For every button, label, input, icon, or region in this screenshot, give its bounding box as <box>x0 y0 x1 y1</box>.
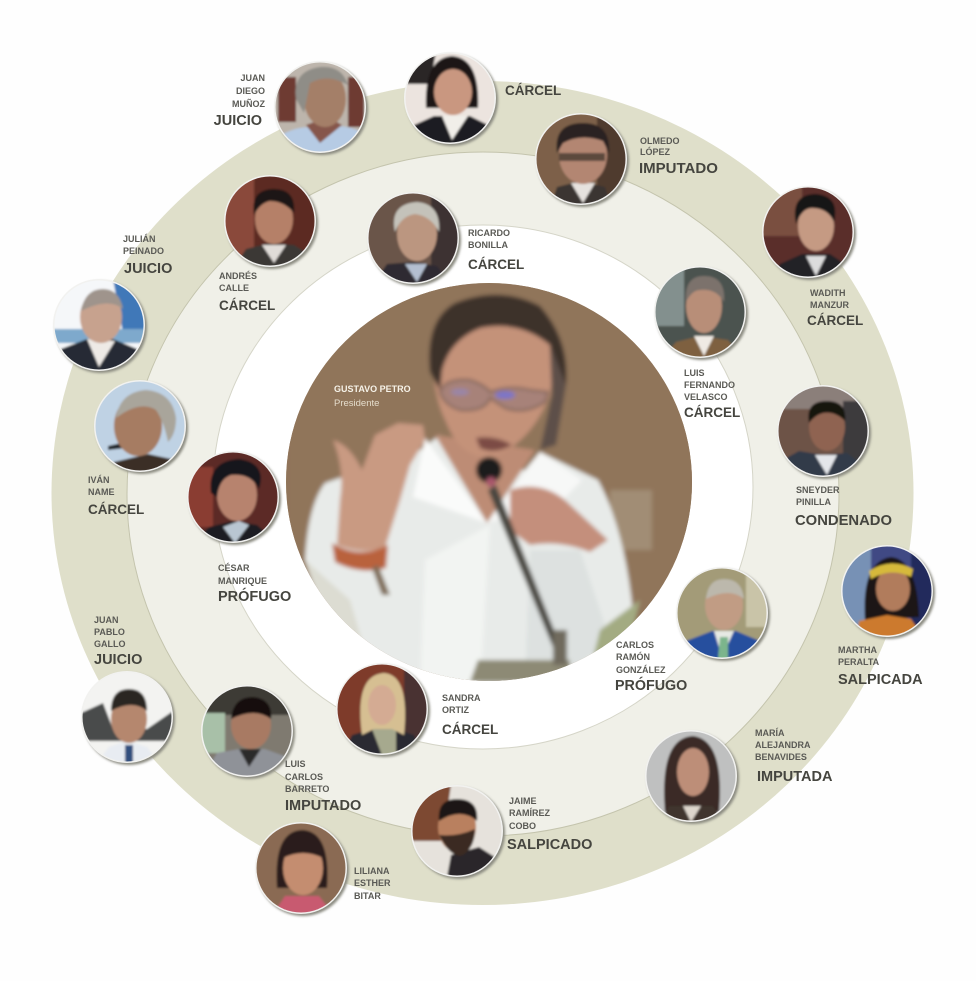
person: Iván Name <box>88 380 188 517</box>
label: Jaime Ramírez Cobo: RAMÍREZ <box>509 808 550 818</box>
person: Luis Carlos Barreto <box>201 685 361 814</box>
label: Sneyder Pinilla: CONDENADO <box>795 513 892 529</box>
label: Liliana Esther Bitar: ESTHER <box>354 878 391 888</box>
label: Juan Pablo Gallo: JUAN <box>94 615 119 625</box>
person: María Alejandra Benavides <box>645 728 833 824</box>
label: María Alejandra Benavides: MARÍA <box>755 728 785 738</box>
label: Liliana Esther Bitar: LILIANA <box>354 866 390 876</box>
person: Liliana Esther Bitar <box>255 822 391 916</box>
label: Julián Peinado: JUICIO <box>124 261 172 277</box>
inner ring <box>213 225 753 749</box>
person: Martha Peralta <box>838 545 935 688</box>
label: César Manrique: CÉSAR <box>218 563 250 573</box>
person: Ricardo Bonilla <box>367 192 524 286</box>
person: woman top <box>404 52 561 146</box>
label: Sandra Ortiz: SANDRA <box>442 693 481 703</box>
person: Olmedo López <box>535 113 718 207</box>
label: Ricardo Bonilla: CÁRCEL <box>468 257 524 272</box>
label: Iván Name: NAME <box>88 487 114 497</box>
label: Wadith Manzur <box>807 288 863 328</box>
label: Olmedo López: OLMEDO <box>640 136 680 146</box>
label: Juan Diego Muñoz: JUAN <box>240 73 265 83</box>
label: Andrés Calle: ANDRÉS <box>219 271 257 281</box>
person: Julián Peinado <box>53 234 172 373</box>
label: Luis Fernando Velasco: VELASCO <box>684 392 728 402</box>
person: César Manrique <box>187 451 291 605</box>
label: Wadith Manzur: WADITH <box>810 288 846 298</box>
label: Martha Peralta: PERALTA <box>838 657 880 667</box>
label: Ricardo Bonilla <box>468 228 524 272</box>
label: Martha Peralta <box>838 645 923 688</box>
name: Gustavo Petro: Presidente <box>334 398 379 409</box>
label: Julián Peinado: JULIÁN <box>123 234 156 244</box>
label: Liliana Esther Bitar <box>354 866 391 901</box>
label: Carlos Ramón González: GONZÁLEZ <box>616 665 666 675</box>
label: Olmedo López: IMPUTADO <box>639 160 718 177</box>
label: Iván Name: CÁRCEL <box>88 502 144 517</box>
label: Martha Peralta: SALPICADA <box>838 672 923 688</box>
label: María Alejandra Benavides: IMPUTADA <box>757 769 833 785</box>
label: Carlos Ramón González: RAMÓN <box>616 651 650 662</box>
person: Juan Pablo Gallo <box>81 615 175 765</box>
label: Martha Peralta: MARTHA <box>838 645 877 655</box>
label: César Manrique: MANRIQUE <box>218 576 267 586</box>
name: Gustavo Petro <box>334 384 411 409</box>
label: César Manrique <box>218 563 291 605</box>
label: Luis Carlos Barreto <box>285 759 361 814</box>
label: Carlos Ramón González: PRÓFUGO <box>615 676 687 694</box>
label: Wadith Manzur: MANZUR <box>810 300 849 310</box>
person: Luis Fernando Velasco <box>654 266 748 420</box>
person: Carlos Ramón González <box>615 567 770 694</box>
label: Olmedo López: LÓPEZ <box>640 146 671 157</box>
label: Andrés Calle: CALLE <box>219 283 249 293</box>
person: Jaime Ramírez Cobo <box>411 785 592 879</box>
label: María Alejandra Benavides <box>755 728 833 785</box>
label: César Manrique: PRÓFUGO <box>218 587 291 605</box>
label: Cárcel: CÁRCEL <box>505 83 561 98</box>
person: Andrés Calle <box>219 175 318 313</box>
central photo: Gustavo Petro <box>286 283 696 690</box>
outer ring <box>52 81 914 905</box>
label: Luis Fernando Velasco: CÁRCEL <box>684 405 740 420</box>
label: Sneyder Pinilla <box>795 485 892 529</box>
label: Andrés Calle: CÁRCEL <box>219 298 275 313</box>
label: Luis Fernando Velasco: FERNANDO <box>684 380 735 390</box>
middle ring <box>127 152 839 836</box>
label: Julián Peinado <box>123 234 172 277</box>
label: Carlos Ramón González <box>615 640 687 694</box>
person: Sneyder Pinilla <box>777 385 892 529</box>
label: María Alejandra Benavides: BENAVIDES <box>755 752 807 762</box>
label: Iván Name <box>88 475 144 517</box>
label: Luis Carlos Barreto: CARLOS <box>285 772 323 782</box>
label: Carlos Ramón González: CARLOS <box>616 640 654 650</box>
label: Sandra Ortiz: ORTIZ <box>442 705 469 715</box>
person: Sandra Ortiz <box>336 663 498 757</box>
label: María Alejandra Benavides: ALEJANDRA <box>755 740 811 750</box>
label: Juan Diego Muñoz: DIEGO <box>236 86 265 96</box>
label: Sandra Ortiz: CÁRCEL <box>442 722 498 737</box>
label: Juan Pablo Gallo: PABLO <box>94 627 125 637</box>
label: Ricardo Bonilla: RICARDO <box>468 228 510 238</box>
label: Luis Carlos Barreto: LUIS <box>285 759 306 769</box>
label: Luis Fernando Velasco <box>684 368 740 420</box>
label: Olmedo López <box>639 136 718 177</box>
label: Sandra Ortiz <box>442 693 498 737</box>
label: Sneyder Pinilla: SNEYDER <box>796 485 840 495</box>
label: Jaime Ramírez Cobo: SALPICADO <box>507 837 592 853</box>
person: Wadith Manzur <box>762 186 863 328</box>
label: Liliana Esther Bitar: BITAR <box>354 891 381 901</box>
label: Andrés Calle <box>219 271 275 313</box>
label: Luis Fernando Velasco: LUIS <box>684 368 705 378</box>
label: Juan Diego Muñoz: JUICIO <box>214 113 262 129</box>
label: Juan Pablo Gallo <box>94 615 142 668</box>
label: Luis Carlos Barreto: BARRETO <box>285 784 329 794</box>
label: Luis Carlos Barreto: IMPUTADO <box>285 798 361 814</box>
label: Juan Pablo Gallo: GALLO <box>94 639 126 649</box>
label: Iván Name: IVÁN <box>88 475 110 485</box>
label: Juan Diego Muñoz <box>214 73 265 129</box>
label: Julián Peinado: PEINADO <box>123 246 164 256</box>
label: Jaime Ramírez Cobo: JAIME <box>509 796 537 806</box>
person: Juan Diego Muñoz <box>214 61 368 155</box>
label: Juan Pablo Gallo: JUICIO <box>94 652 142 668</box>
label: Juan Diego Muñoz: MUÑOZ <box>232 99 265 109</box>
label: Jaime Ramírez Cobo <box>507 796 592 853</box>
label: Sneyder Pinilla: PINILLA <box>796 497 831 507</box>
label: Jaime Ramírez Cobo: COBO <box>509 821 536 831</box>
label: Wadith Manzur: CÁRCEL <box>807 313 863 328</box>
name: Gustavo Petro: GUSTAVO PETRO <box>334 384 411 394</box>
label: Ricardo Bonilla: BONILLA <box>468 240 508 250</box>
